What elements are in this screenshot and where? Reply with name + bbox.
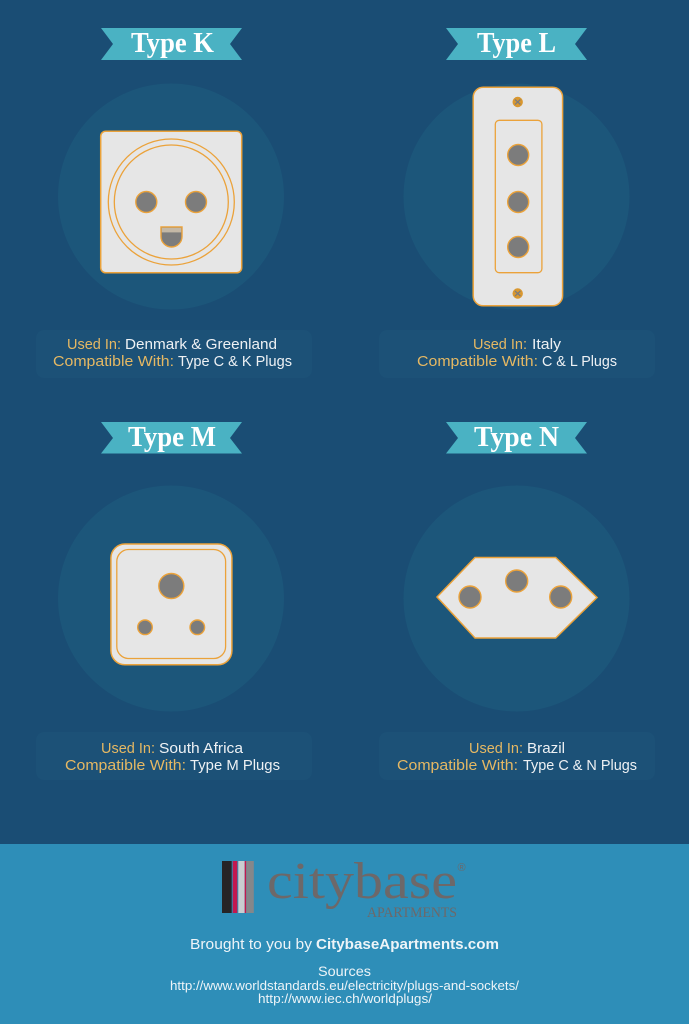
logo: Citybase Apartments: APARTMENTS	[367, 905, 457, 921]
info box: Type M	[36, 732, 312, 780]
background circle N	[404, 486, 630, 712]
info box: Type K: Compatible With:	[53, 354, 174, 370]
info box: Type K: Denmark & Greenland	[125, 337, 277, 353]
info box: Type L	[379, 330, 655, 378]
info box: Type M: Compatible With:	[65, 758, 186, 774]
banner: Type K	[101, 27, 242, 60]
credit line: CitybaseApartments.com	[316, 937, 499, 953]
info box: Type K	[36, 330, 312, 378]
icon: Type M socket	[111, 544, 232, 665]
background circle M	[58, 486, 284, 712]
background circle L	[404, 84, 630, 310]
icon: logo stripes	[222, 861, 254, 913]
info box: Type N: Brazil	[527, 741, 565, 757]
info box: Type L: Used In:	[473, 337, 527, 353]
info box: Type L: Compatible With:	[417, 354, 538, 370]
sources	[170, 963, 519, 1006]
banner: Type M	[101, 421, 242, 454]
info box: Type L: C & L Plugs	[542, 354, 617, 370]
panel: Type K	[36, 27, 312, 378]
panel: Type N	[379, 421, 655, 780]
info box: Type N: Compatible With:	[397, 758, 518, 774]
logo: Citybase Apartments: citybase	[267, 853, 457, 910]
logo: Citybase Apartments	[222, 853, 466, 921]
background circle K	[58, 84, 284, 310]
banner: Type N: Type N	[474, 421, 559, 453]
footer panel	[0, 844, 689, 1024]
sources: Sources	[318, 963, 371, 979]
info box: Type M: South Africa	[159, 741, 244, 757]
icon: Type K socket	[101, 131, 242, 273]
banner: Type L	[446, 27, 587, 60]
sources: http://www.iec.ch/worldplugs/	[258, 991, 432, 1006]
icon: bottom screw	[512, 288, 523, 299]
info box: Type K: Used In:	[67, 337, 121, 353]
banner: Type K: Type K	[131, 27, 214, 59]
credit line: Brought to you by	[190, 937, 313, 953]
credit line	[190, 937, 499, 953]
banner: Type L: Type L	[477, 27, 556, 59]
info box: Type K: Type C & K Plugs	[178, 354, 292, 370]
panel: Type L	[379, 27, 655, 378]
icon: top screw	[512, 97, 523, 107]
info box: Type N: Type C & N Plugs	[523, 758, 637, 774]
icon: Type N socket	[437, 558, 597, 638]
info box: Type L: Italy	[532, 337, 562, 353]
sources: http://www.worldstandards.eu/electricity/plugs-and-sockets/	[170, 978, 519, 993]
logo: Citybase Apartments: ®	[457, 862, 466, 874]
info box: Type M: Used In:	[101, 741, 155, 757]
banner: Type N	[446, 421, 587, 454]
panel: Type M	[36, 421, 312, 780]
info box: Type N: Used In:	[469, 741, 523, 757]
info box: Type N	[379, 732, 655, 780]
icon: Type L socket	[473, 87, 563, 306]
info box: Type M: Type M Plugs	[190, 758, 280, 774]
banner: Type M: Type M	[128, 421, 216, 453]
